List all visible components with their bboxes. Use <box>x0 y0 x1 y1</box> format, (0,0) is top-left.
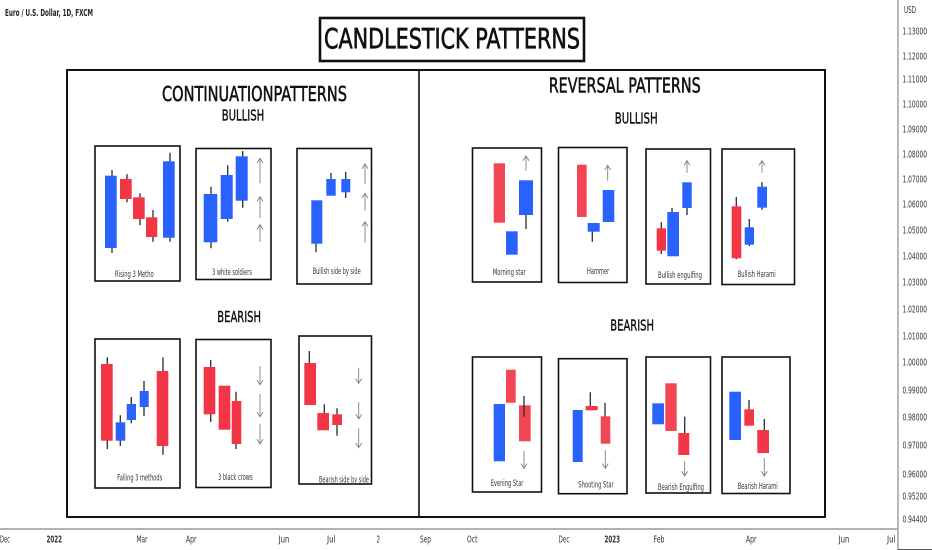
label: bearish side by side: Bearish side by side <box>319 476 369 486</box>
symbol header: Euro / U.S. Dollar, 1D, FXCM <box>5 8 93 19</box>
heading: continuation patterns: CONTINUATIONPATTERNS <box>162 82 347 106</box>
arrows: down <box>356 368 362 448</box>
label: hammer: Hammer <box>587 267 610 277</box>
label: shooting star: Shooting Star <box>578 481 614 491</box>
time axis: 2022 <box>46 534 62 546</box>
panel: bearish harami <box>722 357 790 494</box>
label: bearish engulfing: Bearish Engulfing <box>658 483 704 493</box>
time axis: Oct <box>467 534 478 546</box>
time axis: Mar <box>136 534 148 546</box>
panel: shooting star <box>558 359 627 494</box>
time axis: Jul <box>326 534 336 546</box>
heading: reversal patterns: REVERSAL PATTERNS <box>549 74 701 98</box>
time axis: Feb <box>654 534 664 546</box>
panel: falling 3 methods <box>95 339 180 488</box>
panel: bullish side by side <box>297 148 372 284</box>
label: bullish harami: Bullish Harami <box>738 270 776 280</box>
panel: 3 black crows <box>196 340 271 488</box>
arrows: up <box>362 164 368 243</box>
time axis: Jun <box>278 534 290 546</box>
time axis: Sep <box>420 534 431 546</box>
arrow: down <box>761 458 767 476</box>
label: 3 white soldiers: 3 white soldiers <box>212 268 252 278</box>
time axis <box>0 529 898 546</box>
panel: bullish harami <box>722 149 794 284</box>
heading: reversal bullish: BULLISH <box>615 109 658 127</box>
panel: rising 3 methods <box>95 146 180 281</box>
label: 3 black crows: 3 black crows <box>218 473 253 483</box>
arrow: up <box>523 156 529 171</box>
arrow: down <box>602 450 608 468</box>
heading: continuation bullish: BULLISH <box>222 107 264 125</box>
time axis: 2023 <box>604 534 620 546</box>
label: bearish harami: Bearish Harami <box>738 482 778 492</box>
title: CANDLESTICK PATTERNS <box>324 22 580 55</box>
label: rising 3 methods: Rising 3 Metho <box>115 270 154 280</box>
arrow: up <box>759 161 765 173</box>
arrow: up <box>684 161 690 173</box>
label: evening star: Evening Star <box>491 479 524 489</box>
panel: bearish side by side <box>299 336 372 486</box>
time axis: Dec <box>0 534 10 546</box>
panel: evening star <box>472 357 542 492</box>
label: bullish engulfing: Bullish engulfing <box>658 271 702 281</box>
main frame <box>67 70 825 517</box>
time axis: Apr <box>746 534 757 546</box>
panel: morning star <box>472 148 542 282</box>
panel: hammer <box>558 148 627 282</box>
panel: 3 white soldiers <box>196 148 271 280</box>
heading: reversal bearish: BEARISH <box>610 317 654 335</box>
panel: bearish engulfing <box>646 357 710 493</box>
time axis: 2 <box>376 534 380 546</box>
heading: continuation bearish: BEARISH <box>217 308 261 326</box>
arrows: down <box>257 366 263 444</box>
time axis: Apr <box>186 534 197 546</box>
time axis: Jun <box>838 534 850 546</box>
price axis: USD <box>904 5 916 16</box>
arrow: down <box>521 451 527 468</box>
title <box>320 18 584 61</box>
label: morning star: Morning star <box>493 268 526 278</box>
arrow: down <box>682 461 688 476</box>
label: falling 3 methods: Falling 3 methods <box>117 474 163 484</box>
label: bullish side by side: Bullish side by side <box>313 267 361 277</box>
time axis: Jul <box>886 534 896 546</box>
arrow: up <box>605 165 611 181</box>
arrows: up <box>257 158 263 242</box>
time axis: Dec <box>558 534 570 546</box>
panel: bullish engulfing <box>646 149 710 284</box>
price axis <box>898 0 932 550</box>
